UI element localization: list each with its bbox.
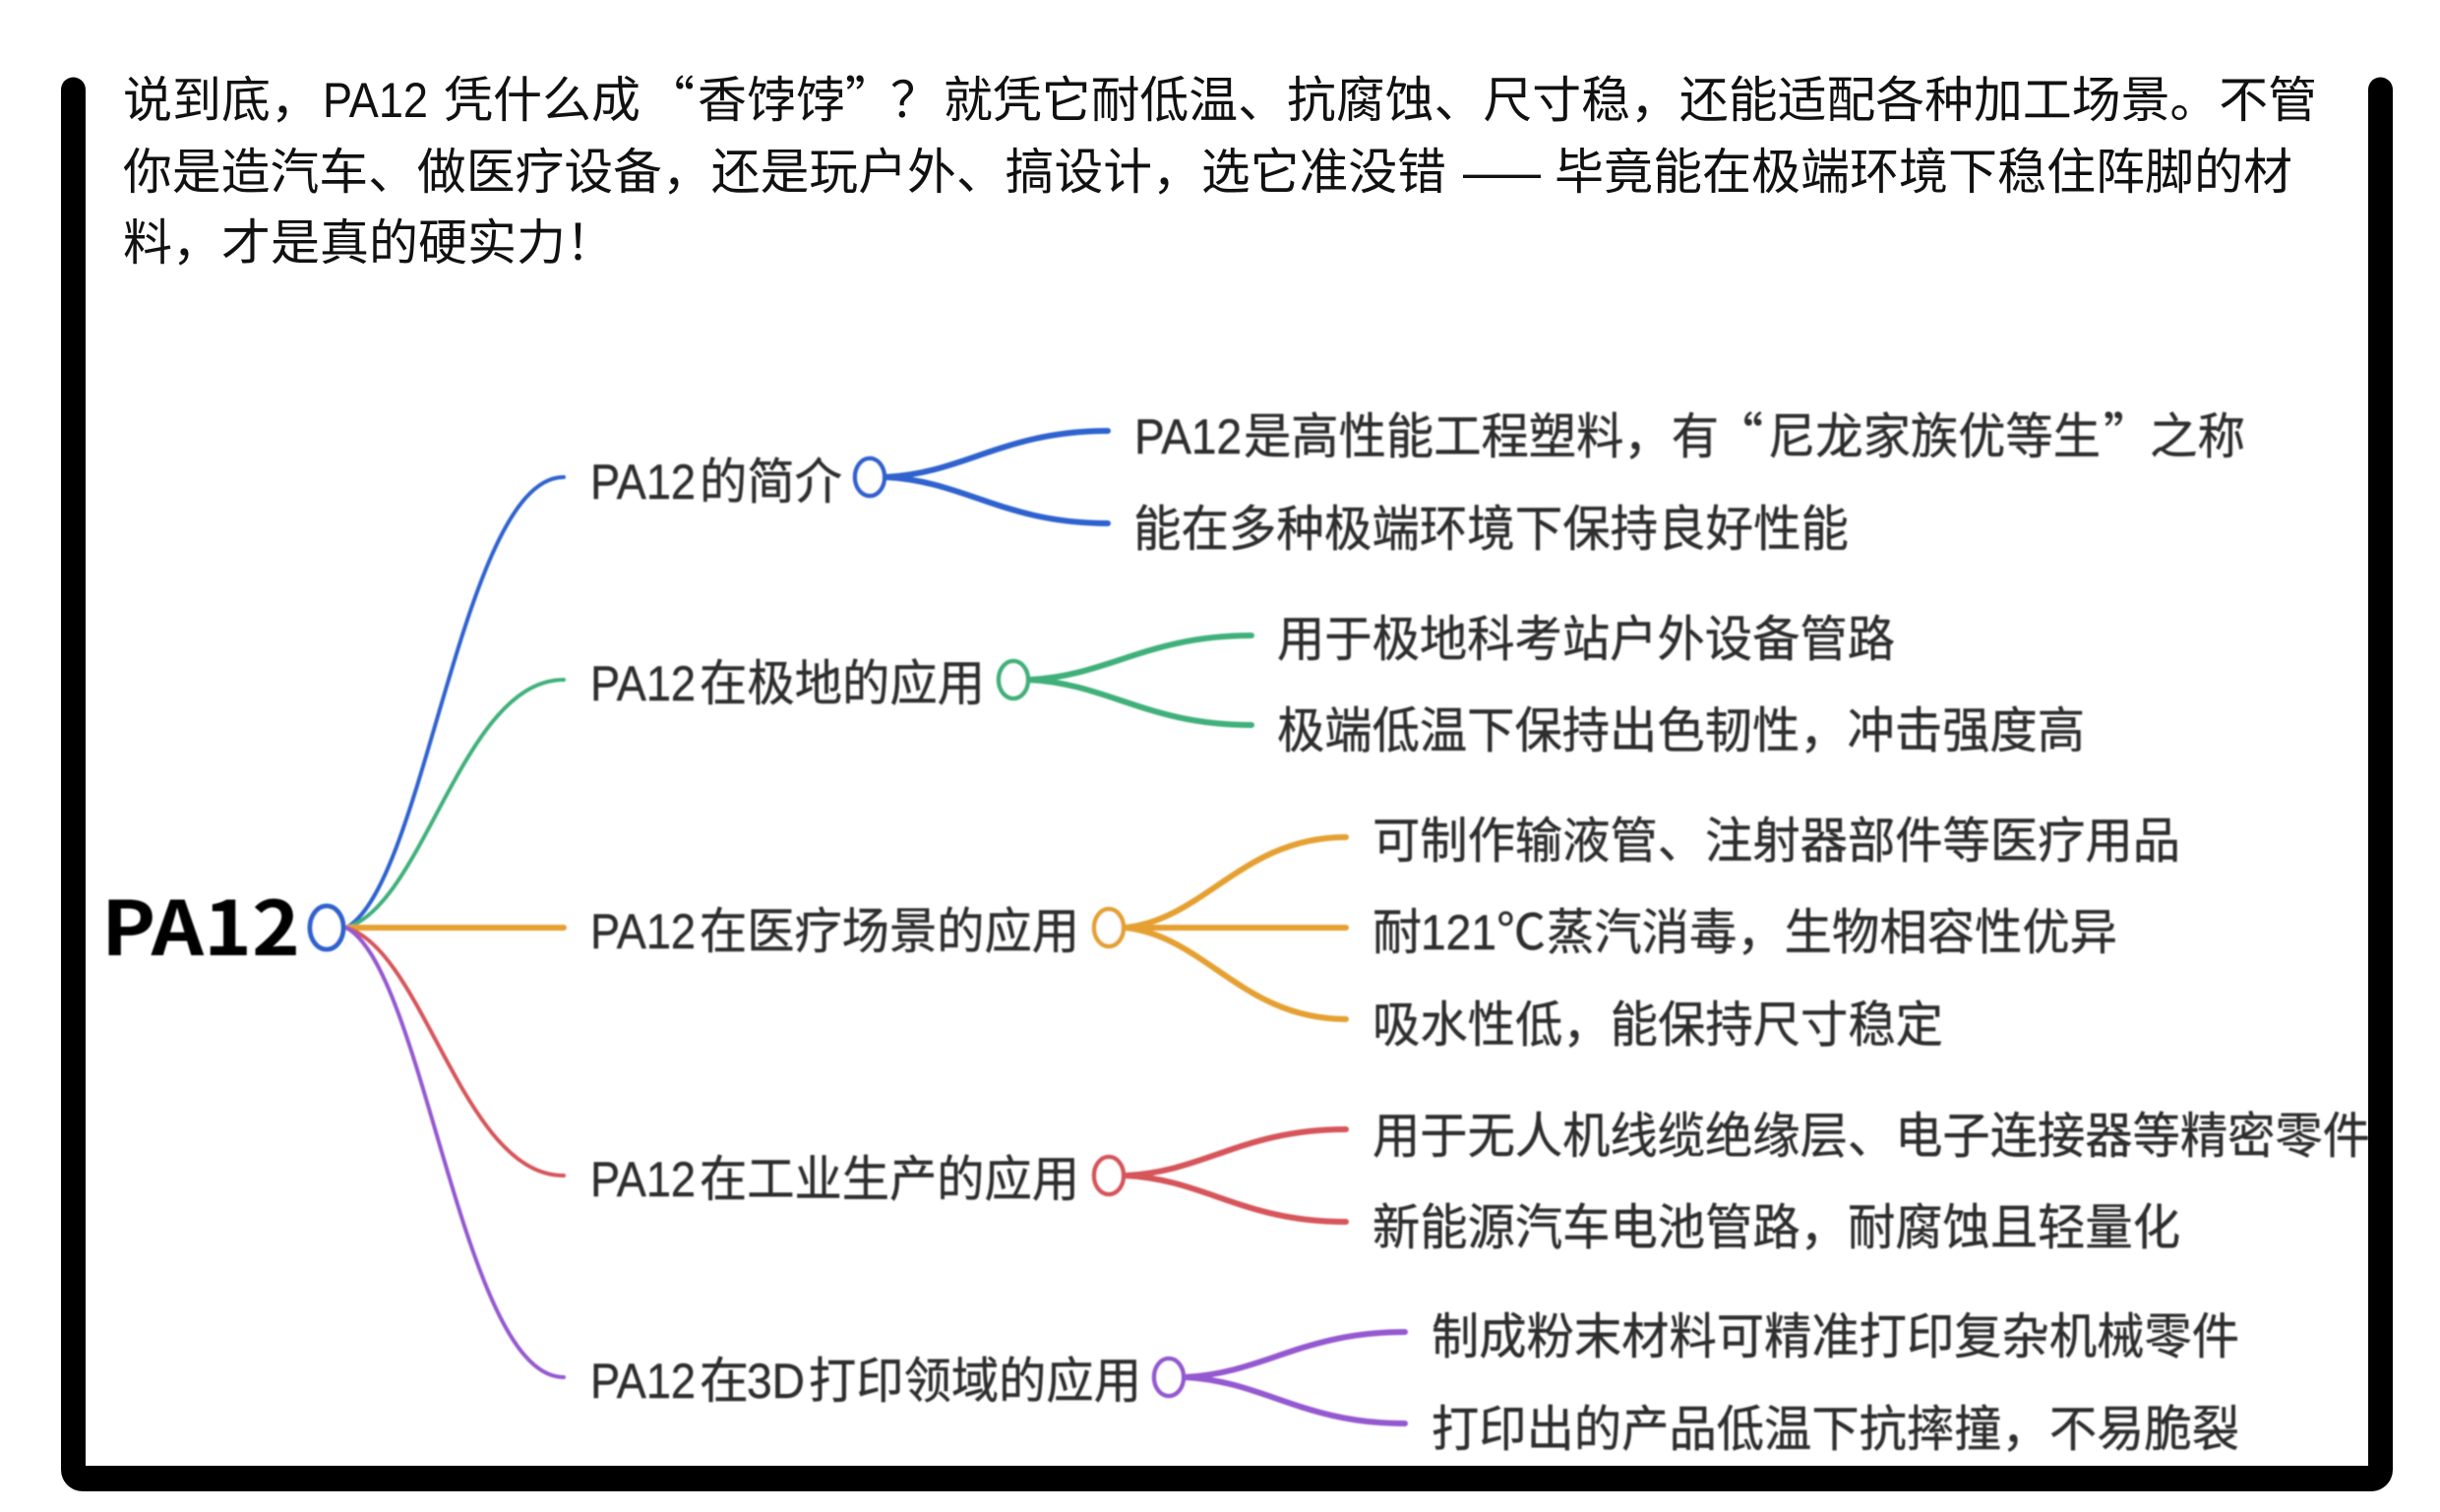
branch: 3D printing — [590, 1309, 2239, 1457]
branch: introduction: 能在多种极端环境下保持良好性能 — [1133, 502, 1849, 557]
branch: introduction: ” — [2104, 397, 2153, 468]
branch: 3D printing: 打印领域的应用 — [809, 1354, 1141, 1409]
intro paragraph: 香饽饽 — [698, 73, 845, 128]
intro paragraph: 就凭它耐低温、抗腐蚀、尺寸稳，还能适配各种加工场景。不管 — [944, 73, 2317, 128]
branch: introduction: PA12 — [1134, 409, 1242, 464]
branch: introduction: “ — [1714, 397, 1763, 468]
branch: polar: PA12 — [590, 656, 696, 711]
branch: medical: 可制作输液管、注射器部件等医疗用品 — [1372, 814, 2180, 869]
branch: 3D printing: PA12 — [590, 1354, 696, 1409]
branch: introduction: 的简介 — [700, 454, 842, 510]
branch: polar: 极端低温下保持出色韧性，冲击强度高 — [1277, 703, 2085, 758]
branch: medical: PA12 — [590, 904, 696, 959]
intro paragraph — [123, 61, 2317, 271]
branch: introduction: 是高性能工程塑料，有 — [1244, 409, 1719, 464]
branch: introduction: 尼龙家族优等生 — [1768, 409, 2101, 464]
intro paragraph: 你是造汽车、做医疗设备，还是玩户外、搞设计，选它准没错 — [123, 145, 1446, 200]
branch: medical: 在医疗场景的应用 — [700, 904, 1079, 959]
intro paragraph: 凭什么成 — [444, 73, 640, 128]
intro paragraph: 毕竟能在极端环境下稳住阵脚的材 — [1555, 145, 2292, 200]
branch: medical: ℃ — [1496, 905, 1546, 960]
intro paragraph: PA12 — [323, 73, 428, 128]
branch: 3D printing: 3D — [747, 1354, 805, 1409]
branch: 3D printing: 制成粉末材料可精准打印复杂机械零件 — [1432, 1309, 2239, 1364]
branch: introduction: 之称 — [2150, 409, 2245, 464]
branch: industrial: 用于无人机线缆绝缘层、电子连接器等精密零件 — [1372, 1109, 2370, 1164]
branch: 3D printing: 打印出的产品低温下抗摔撞，不易脆裂 — [1432, 1402, 2239, 1457]
intro paragraph: “ — [645, 61, 695, 132]
branch: polar: 在极地的应用 — [700, 656, 985, 711]
intro paragraph: 说到底， — [123, 73, 320, 128]
intro paragraph: ？ — [890, 73, 940, 128]
branch: polar: 用于极地科考站户外设备管路 — [1277, 612, 1895, 667]
branch: polar — [590, 612, 2085, 758]
branch: medical: 蒸汽消毒，生物相容性优异 — [1547, 905, 2117, 960]
branch: industrial: PA12 — [590, 1152, 696, 1207]
branch: industrial: 新能源汽车电池管路，耐腐蚀且轻量化 — [1372, 1200, 2180, 1255]
intro paragraph: 料，才是真的硬实力！ — [123, 215, 615, 271]
branch: medical: 吸水性低，能保持尺寸稳定 — [1372, 998, 1943, 1053]
branch: medical: 121 — [1421, 905, 1496, 960]
intro paragraph: ” — [845, 61, 894, 132]
mind map — [101, 397, 2370, 1457]
root label: PA12 — [101, 869, 300, 977]
root node circle — [310, 906, 343, 949]
branch: industrial — [590, 1109, 2370, 1255]
branch: industrial: 在工业生产的应用 — [700, 1152, 1079, 1207]
branch: introduction: PA12 — [590, 454, 696, 510]
branch: introduction — [590, 397, 2245, 557]
root branches — [346, 477, 564, 1377]
branch: medical — [590, 814, 2180, 1053]
intro paragraph: —— — [1463, 145, 1541, 200]
branch: medical: 耐 — [1372, 905, 1422, 960]
branch: 3D printing: 在 — [700, 1354, 749, 1409]
